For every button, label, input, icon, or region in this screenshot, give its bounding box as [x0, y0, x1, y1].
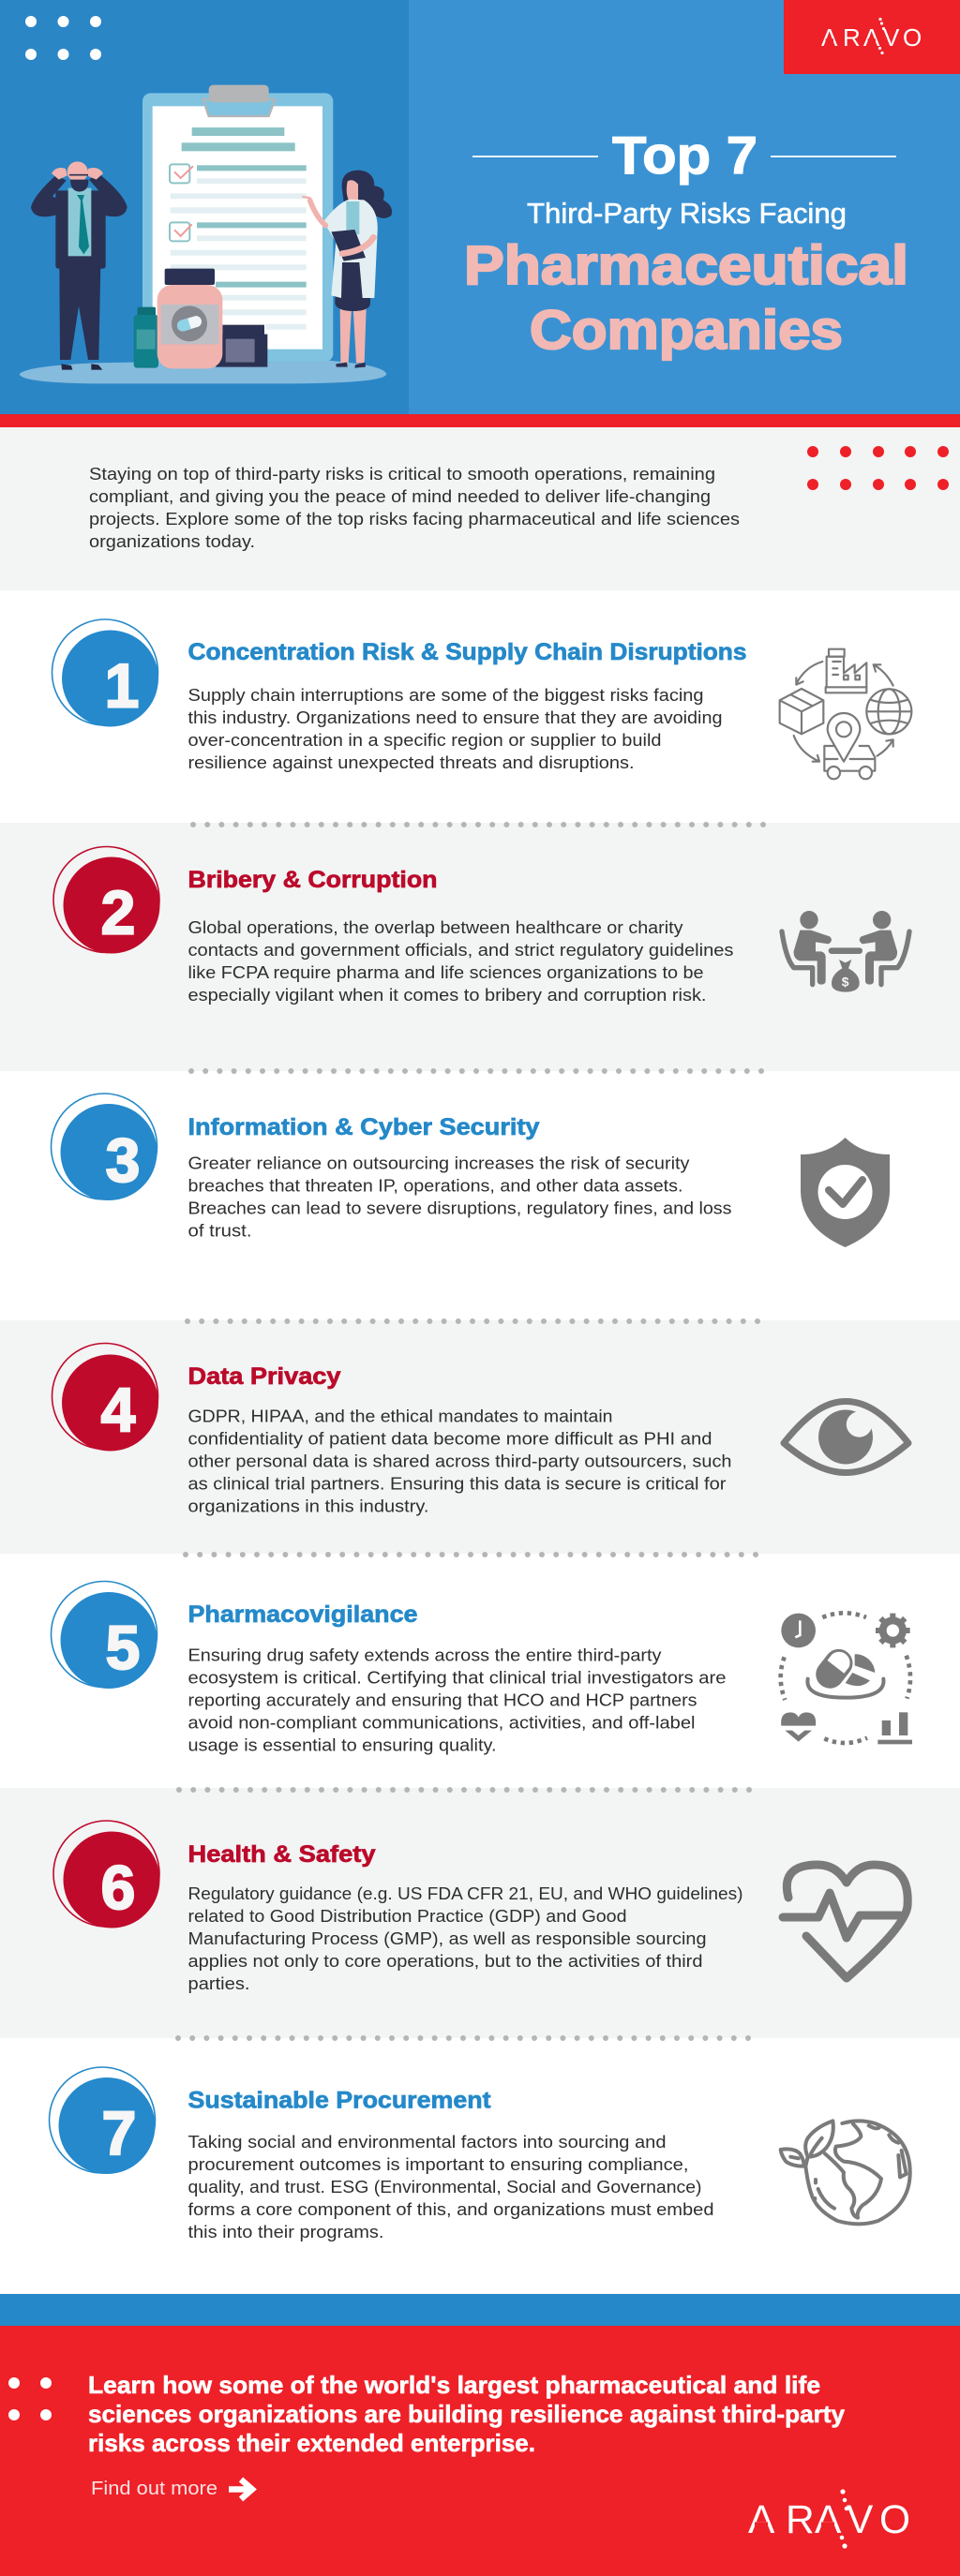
panel: risk 5 — [0, 1554, 960, 1788]
number badge 3: 3 — [106, 1125, 140, 1195]
call to action text: sciences organizations are building resilience against third-party — [88, 2400, 846, 2428]
number badge 7: 7 — [102, 2098, 136, 2167]
number badge 7 — [49, 2067, 156, 2174]
heading: Data Privacy — [188, 1363, 341, 1390]
pill jar — [158, 269, 222, 368]
call to action text: Learn how some of the world's largest pharmaceutical and life — [88, 2371, 820, 2399]
icon: pharmacovigilance pills — [781, 1613, 912, 1744]
body text — [188, 1406, 731, 1516]
body text: as clinical trial partners. Ensuring this data is secure is critical for — [188, 1473, 726, 1494]
icon: eye — [784, 1402, 908, 1473]
body text — [188, 2132, 714, 2241]
number badge 1 — [52, 619, 158, 727]
panel: risk 1 — [0, 590, 960, 823]
icon: arrow — [229, 2479, 252, 2499]
panel: header — [0, 0, 960, 414]
title rule left — [472, 156, 598, 157]
heading: Health & Safety — [188, 1841, 376, 1868]
man in suit — [31, 161, 128, 370]
icon: shield with check — [801, 1138, 890, 1247]
body text: GDPR, HIPAA, and the ethical mandates to maintain — [188, 1406, 613, 1426]
panel: risk 7 — [0, 2038, 960, 2294]
blue band — [0, 2294, 960, 2326]
body text: other personal data is shared across third-party outsourcers, such — [188, 1451, 731, 1471]
panel: introduction — [0, 427, 960, 590]
number badge 6: 6 — [101, 1853, 135, 1922]
icon: heart with pulse — [783, 1865, 908, 1978]
body text: breaches that threaten IP, operations, and other data assets. — [188, 1175, 682, 1196]
number badge 3 — [51, 1094, 158, 1200]
body text: procurement outcomes is important to ensuring compliance, — [188, 2154, 688, 2174]
intro text: compliant, and giving you the peace of mind needed to deliver life-changing — [89, 486, 711, 506]
body text — [188, 1645, 726, 1754]
red divider bar — [0, 414, 960, 427]
woman in lab coat — [303, 171, 392, 368]
panel: risk 3 — [0, 1071, 960, 1320]
decorative white dots — [25, 16, 101, 60]
call to action text — [88, 2371, 846, 2457]
title: Pharmaceutical — [464, 235, 908, 296]
illustration: clipboard, medicine and two people — [20, 85, 392, 383]
body text: Taking social and environmental factors into sourcing and — [188, 2132, 666, 2152]
panel: risk 6 — [0, 1788, 960, 2038]
heading: Information & Cyber Security — [188, 1114, 540, 1140]
body text: confidentiality of patient data become more difficult as PHI and — [188, 1428, 712, 1449]
intro text: Staying on top of third-party risks is critical to smooth operations, remaining — [89, 464, 715, 484]
body text: ecosystem is critical. Certifying that clinical trial investigators are — [188, 1668, 726, 1687]
panel: risk 4 — [0, 1320, 960, 1554]
intro text — [89, 464, 740, 551]
body text: parties. — [188, 1973, 249, 1993]
call to action text: risks across their extended enterprise. — [88, 2429, 535, 2457]
body text: reporting accurately and ensuring that HCO and HCP partners — [188, 1690, 698, 1709]
body text: related to Good Distribution Practice (GDP) and Good — [188, 1906, 626, 1926]
title: Companies — [530, 300, 843, 361]
body text: this industry. Organizations need to ensure that they are avoiding — [188, 707, 722, 727]
body text — [188, 1884, 742, 1993]
number badge 4 — [52, 1344, 158, 1451]
logo: Aravo top — [784, 0, 960, 74]
teal bottle — [134, 307, 158, 368]
body text: forms a core component of this, and organizations must embed — [188, 2199, 714, 2219]
title: Top 7 — [612, 126, 758, 186]
number badge 2: 2 — [101, 877, 135, 946]
dark box — [216, 325, 267, 367]
find out more link: Find out more — [91, 2479, 218, 2499]
ground — [20, 359, 386, 383]
clipboard — [142, 85, 333, 362]
body text: Breaches can lead to severe disruptions, regulatory fines, and loss — [188, 1198, 731, 1218]
body text: Ensuring drug safety extends across the entire third-party — [188, 1645, 662, 1664]
body text: especially vigilant when it comes to bribery and corruption risk. — [188, 985, 707, 1005]
body text: applies not only to core operations, but to the activities of third — [188, 1951, 703, 1971]
number badge 5: 5 — [106, 1613, 140, 1682]
body text — [188, 685, 722, 772]
body text: Regulatory guidance (e.g. US FDA CFR 21, EU, and WHO guidelines) — [188, 1884, 742, 1903]
body text: of trust. — [188, 1220, 251, 1241]
icon: bribery meeting: $ — [842, 975, 849, 990]
body text: contacts and government officials, and strict regulatory guidelines — [188, 940, 733, 960]
body text: Manufacturing Process (GMP), as well as responsible sourcing — [188, 1928, 707, 1948]
icon: supply chain cycle — [780, 649, 911, 779]
heading: Pharmacovigilance — [188, 1601, 418, 1628]
number badge 1: 1 — [105, 650, 139, 720]
body text: Supply chain interruptions are some of the biggest risks facing — [188, 685, 703, 705]
title rule right — [771, 156, 896, 157]
heading: Sustainable Procurement — [188, 2088, 491, 2114]
icon: globe with leaves — [781, 2121, 910, 2224]
title — [464, 126, 908, 361]
number badge 4: 4 — [101, 1375, 136, 1444]
decorative red dots — [807, 446, 949, 490]
icon: bribery meeting — [782, 911, 909, 992]
body text — [188, 917, 733, 1005]
title: Third-Party Risks Facing — [527, 197, 847, 230]
number badge 6 — [53, 1821, 159, 1928]
body text: like FCPA require pharma and life sciences organizations to be — [188, 962, 703, 982]
body text: usage is essential to ensuring quality. — [188, 1735, 497, 1754]
body text — [188, 1153, 731, 1241]
body text: organizations in this industry. — [188, 1496, 429, 1516]
body text: Global operations, the overlap between healthcare or charity — [188, 917, 683, 937]
body text: Greater reliance on outsourcing increases the risk of security — [188, 1153, 690, 1173]
logo: Aravo bottom: ARAVO — [748, 2498, 910, 2542]
heading: Bribery & Corruption — [188, 867, 437, 893]
body text: this into their programs. — [188, 2222, 384, 2241]
logo: Aravo top: ARAVO — [821, 23, 922, 52]
panel: risk 2 — [0, 823, 960, 1071]
intro text: projects. Explore some of the top risks facing pharmaceutical and life sciences — [89, 509, 740, 529]
intro text: organizations today. — [89, 531, 255, 551]
body text: quality, and trust. ESG (Environmental, Social and Governance) — [188, 2177, 701, 2196]
body text: avoid non-compliant communications, activities, and off-label — [188, 1713, 696, 1732]
decorative white dots — [8, 2377, 52, 2420]
number badge 5 — [51, 1582, 158, 1689]
number badge 2 — [53, 847, 159, 954]
heading: Concentration Risk & Supply Chain Disruptions — [188, 639, 746, 665]
panel: call to action — [0, 2326, 960, 2576]
body text: over-concentration in a specific region or supplier to build — [188, 730, 662, 750]
separator dots — [178, 825, 767, 2038]
body text: resilience against unexpected threats and disruptions. — [188, 752, 634, 772]
